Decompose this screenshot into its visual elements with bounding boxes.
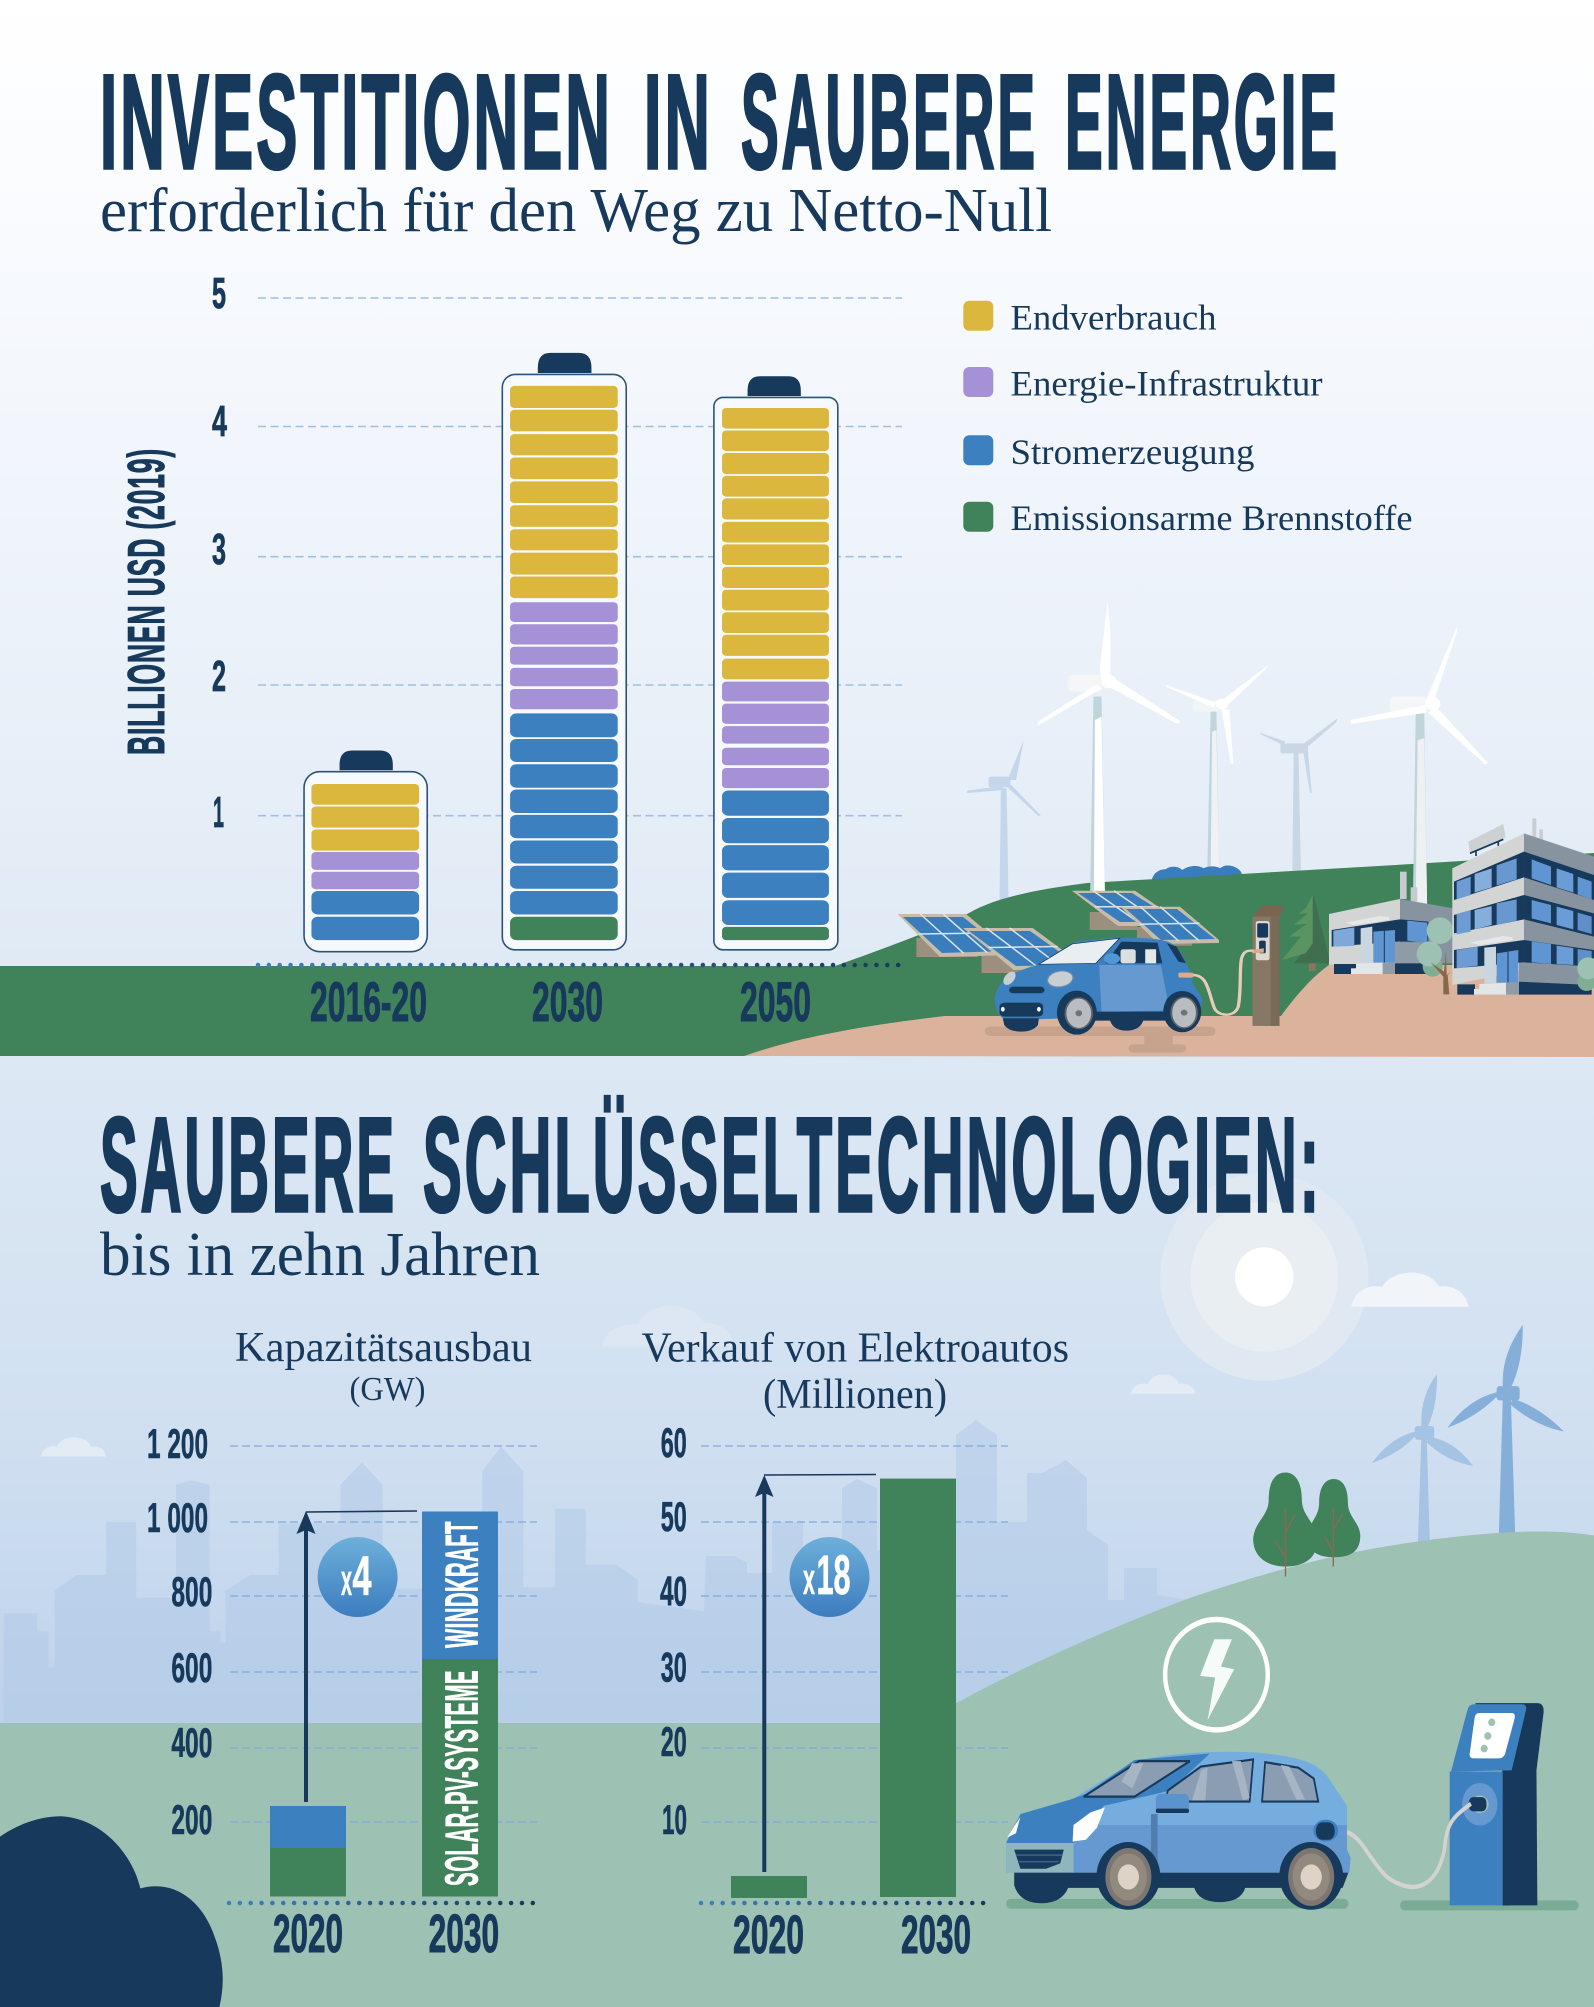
windscreen [1039, 938, 1120, 964]
top chart y axis numbers: 4 [212, 397, 227, 446]
unit: Millionen: (Millionen) [763, 1372, 947, 1418]
lower scene background turbines and hill [723, 1325, 1594, 2007]
baseline dots [701, 1901, 986, 1905]
y axis values: 1 200 [147, 1420, 208, 1467]
battery 2030 [502, 353, 626, 950]
ground shadows [1006, 1899, 1348, 1909]
bar 2030: SOLAR-PV-SYSTEME [436, 1670, 488, 1886]
car body [995, 938, 1202, 1020]
y axis values: 60 [661, 1419, 687, 1466]
y axis values: 10 [662, 1796, 687, 1843]
top chart year labels: 2030 [532, 970, 603, 1033]
scene: solar panels, car, charger [898, 891, 1219, 973]
building large [1452, 818, 1594, 995]
top chart year labels: 2050 [740, 970, 811, 1033]
arrow x4 [296, 1511, 417, 1802]
car charge plug [1178, 973, 1194, 978]
solar panel 3 [1072, 891, 1184, 926]
subtitle: Weg zu Netto-Null: erforderlich für den Weg zu Netto-Null [100, 177, 1052, 245]
hill [723, 1531, 1594, 2007]
badge x18: x [803, 1555, 815, 1604]
heading: Verkauf von Elektroautos: Verkauf von Elektroautos [642, 1326, 1069, 1372]
top chart gridlines and axis [258, 298, 902, 816]
solar panel 2 [963, 928, 1085, 970]
charging post [1251, 906, 1284, 1026]
badge x18: 18 [816, 1543, 850, 1606]
top chart year labels: 2016-20 [310, 970, 427, 1033]
y axis values [147, 1420, 212, 1843]
top chart y axis numbers [212, 269, 227, 837]
top chart y axis numbers: 3 [212, 525, 226, 574]
trees [1253, 1472, 1360, 1576]
y axis values: 200 [171, 1796, 212, 1843]
y axis values: 20 [661, 1718, 687, 1765]
building small [1329, 872, 1453, 974]
legend: Energie-Infrastruktur: Energie-Infrastruktur [1010, 363, 1323, 403]
icon: lightning bolt in circle [1165, 1620, 1268, 1730]
green hill and ground [0, 853, 1594, 1056]
turbine right [1447, 1325, 1564, 1535]
solar panel 1 [898, 914, 1014, 957]
badge x4 [318, 1537, 398, 1617]
x labels [733, 1905, 971, 1965]
lower subtitle: bis in zehn Jahren [100, 1221, 540, 1289]
car underside [1003, 1012, 1168, 1032]
y axis values: 600 [171, 1644, 212, 1691]
turbine grey [1260, 718, 1337, 871]
title: Investitionen in saubere Energie: IN [644, 48, 713, 197]
bar 2020 [270, 1806, 346, 1896]
y axis values [660, 1419, 687, 1843]
chart: electric car sales [642, 1326, 1069, 1965]
y axis values: 40 [660, 1568, 687, 1614]
baseline dots [229, 1901, 536, 1905]
background: lower section sky [0, 1055, 1594, 2007]
car mirror and door shade [1151, 1794, 1189, 1872]
buildings [1329, 818, 1594, 995]
car windows [1084, 1759, 1318, 1802]
y axis values: 50 [661, 1493, 687, 1540]
illustration: electric car at charging station [1006, 1620, 1579, 1910]
background: upper section sky [0, 0, 1594, 1056]
tree right edge [1577, 957, 1594, 991]
top chart baseline dots [258, 963, 902, 967]
charging cable [1334, 1804, 1471, 1887]
turbine right white [1350, 628, 1488, 905]
ground lower section [0, 1723, 1594, 2007]
car shadow [985, 1027, 1215, 1053]
battery 2016-20 [304, 751, 427, 952]
turbine medium white [1165, 666, 1268, 868]
legend: Stromerzeugung: Stromerzeugung [1010, 432, 1254, 472]
rear wheel [1163, 991, 1201, 1032]
unit: GW: (GW) [350, 1371, 426, 1408]
top chart y axis numbers: 2 [212, 652, 226, 701]
battery 2050 [714, 376, 838, 950]
city skyline [4, 1420, 1200, 1724]
foreground turbines standing on the hill [1038, 601, 1488, 905]
x labels: 2020 [273, 1904, 343, 1964]
bar 2030 [422, 1512, 498, 1896]
y axis title: BILLIONEN USD (2019) [118, 448, 176, 755]
top chart y axis numbers: 5 [212, 269, 226, 318]
car underbody [1014, 1870, 1349, 1903]
badge x18 [790, 1537, 870, 1617]
batteries stacked bar chart [304, 353, 838, 952]
pine tree [1282, 895, 1330, 971]
turbine far left [967, 740, 1041, 901]
y axis values: 400 [171, 1719, 212, 1766]
lower chart gridlines [230, 1446, 1008, 1822]
front wheel [1057, 991, 1097, 1035]
lower title: SAUBERE [100, 1091, 397, 1240]
blue bushes on the hill [1152, 865, 1242, 880]
y axis values: 1 000 [147, 1494, 208, 1541]
title: Investitionen in saubere Energie: INVESTITIONEN [100, 48, 613, 197]
charging station [1450, 1703, 1544, 1905]
legend: Endverbrauch: Endverbrauch [1010, 297, 1216, 337]
tree beside building [1417, 917, 1453, 994]
car bumper [1006, 1843, 1073, 1873]
clouds left [41, 1306, 735, 1456]
car headlights [1007, 1808, 1105, 1841]
y axis values: 800 [171, 1568, 212, 1615]
lower title [100, 1091, 1322, 1240]
heading: Kapazitätsausbau: Kapazitätsausbau [235, 1325, 532, 1371]
car hood [1006, 1753, 1210, 1843]
x labels [273, 1904, 499, 1964]
badge x4: x [341, 1556, 352, 1605]
car lower body [1073, 1825, 1351, 1873]
car silhouette [1006, 1752, 1351, 1873]
chart: capacity expansion: WINDKRAFT [436, 1521, 488, 1648]
legend: Emissionsarme Brennstoffe: Emissionsarme Brennstoffe [1010, 498, 1412, 538]
dirt road and foreground [744, 965, 1594, 1057]
solar panel bases [916, 912, 1192, 973]
bar 2030 [880, 1479, 956, 1897]
front wheel [1097, 1842, 1160, 1910]
bar 2020 [731, 1876, 807, 1898]
rear wheel [1279, 1842, 1343, 1910]
small electric car and charging post [985, 906, 1284, 1053]
solar panel 4 [1120, 907, 1219, 944]
x labels: 2020 [733, 1905, 804, 1965]
top chart y axis numbers: 1 [213, 788, 224, 837]
car grille [1014, 1850, 1064, 1869]
charging cable [1193, 951, 1253, 1015]
sun, rings and clouds [1131, 1173, 1469, 1394]
headlights and grille [1043, 968, 1077, 990]
rear window [1167, 943, 1186, 963]
x labels: 2030 [901, 1905, 971, 1965]
chart: capacity expansion [147, 1325, 536, 1964]
window reflections [1121, 1761, 1305, 1800]
badge x4: 4 [352, 1544, 372, 1607]
y axis values: 30 [661, 1644, 687, 1690]
wind turbines and scene background [967, 666, 1337, 901]
title: Investitionen in saubere Energie: SAUBERE [741, 48, 1038, 197]
top chart year labels [310, 970, 811, 1033]
turbine left [1372, 1374, 1473, 1544]
car door [1099, 965, 1167, 1012]
side window [1105, 942, 1162, 963]
car charge plug [1313, 1820, 1338, 1841]
dark tree bottom left [0, 1816, 223, 2007]
turbine large white [1038, 601, 1181, 893]
arrow x18 [755, 1474, 876, 1872]
x labels: 2030 [429, 1904, 499, 1964]
legend [963, 297, 1412, 538]
